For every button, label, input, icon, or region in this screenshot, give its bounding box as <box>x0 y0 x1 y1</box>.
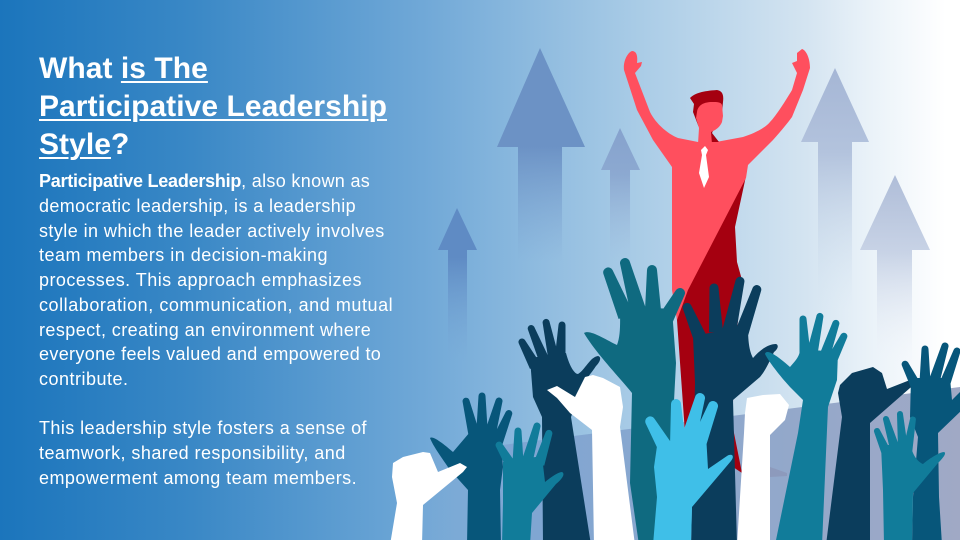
small floor shadow <box>770 467 787 477</box>
intro paragraph: respect, creating an environment where <box>39 320 371 340</box>
intro paragraph: democratic leadership, is a leadership <box>39 196 356 216</box>
intro paragraph: processes. This approach emphasizes <box>39 270 362 290</box>
intro paragraph: Participative Leadership, also known as <box>39 171 370 191</box>
second paragraph: teamwork, shared responsibility, and <box>39 443 346 463</box>
hand: navy far right <box>902 342 960 540</box>
hand: dark navy left <box>518 319 600 540</box>
title: Style? <box>39 128 129 161</box>
figure: dark red shadow and leg <box>676 176 746 473</box>
arrow: small left <box>438 208 477 362</box>
second paragraph: empowerment among team members. <box>39 468 357 488</box>
intro paragraph: collaboration, communication, and mutual <box>39 295 393 315</box>
figure: hair <box>690 90 723 142</box>
hand: white thumb up left <box>390 452 467 540</box>
leader figure <box>624 49 810 473</box>
hand: teal far right front <box>874 411 945 540</box>
hand: white fist <box>737 394 789 540</box>
second paragraph <box>39 418 367 488</box>
figure: face and neck <box>696 102 723 144</box>
intro paragraph: team members in decision-making <box>39 245 328 265</box>
intro paragraph: everyone feels valued and empowered to <box>39 344 381 364</box>
intro paragraph: contribute. <box>39 369 129 389</box>
title: What is The <box>39 52 208 85</box>
hand: dark navy thumb up <box>826 367 918 540</box>
figure: coral body with raised arms <box>624 49 810 320</box>
hand: navy blue left <box>430 392 512 540</box>
hand: light blue <box>645 393 733 540</box>
arrow: small centre <box>601 128 640 262</box>
intro paragraph: style in which the leader actively involves <box>39 220 385 240</box>
arrow: large right <box>801 68 869 310</box>
title <box>39 52 387 161</box>
hand: white thumb up centre <box>547 375 635 540</box>
crowd of raised hands <box>390 258 960 540</box>
second paragraph: This leadership style fosters a sense of <box>39 418 367 438</box>
hand: navy centre-right over leader <box>683 277 778 540</box>
arrow: large centre-left <box>497 48 585 262</box>
hand: teal right <box>765 313 847 540</box>
title: Participative Leadership <box>39 90 387 123</box>
intro paragraph <box>39 171 393 389</box>
figure: white tie <box>699 146 709 188</box>
arrow: far right <box>860 175 930 370</box>
hand: teal left <box>496 422 563 540</box>
hand: large teal <box>584 258 685 540</box>
ground plane <box>400 387 960 540</box>
